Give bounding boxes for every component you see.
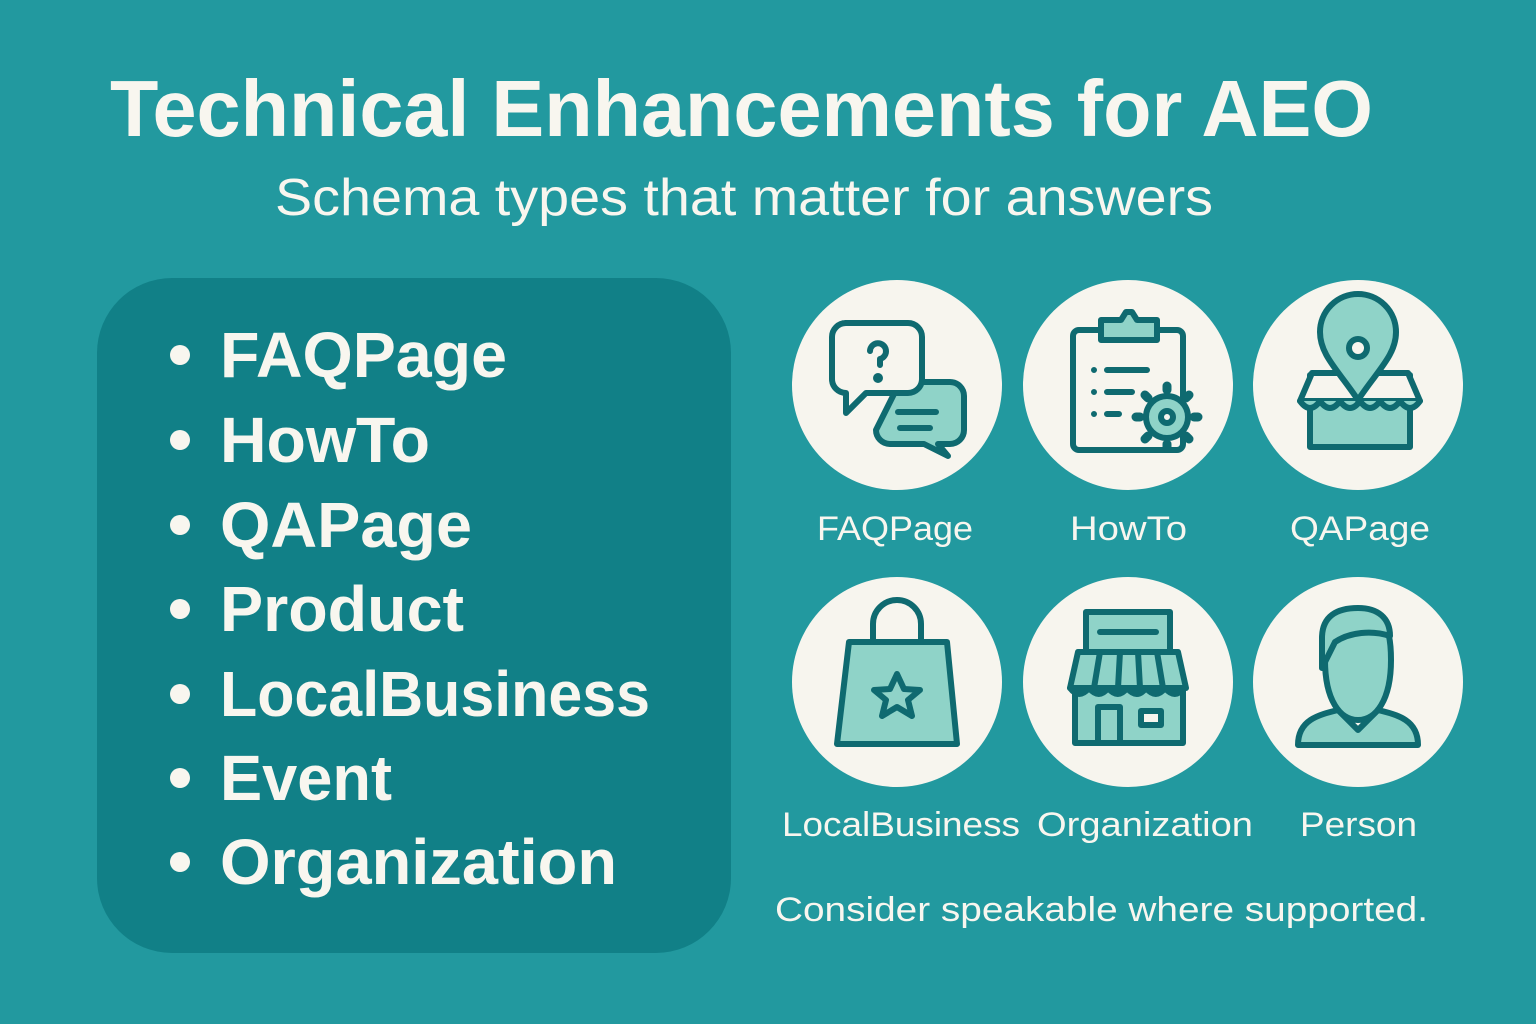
label: Organization: Organization: [1037, 806, 1253, 844]
title: Technical Enhancements for AEO: [110, 64, 1373, 153]
label: FAQPage: FAQPage: [817, 510, 973, 548]
label: QAPage: QAPage: [1290, 510, 1430, 548]
icon: Person: [1253, 577, 1463, 787]
icon: Organization: [1023, 577, 1233, 787]
list item: Event: Event: [220, 742, 392, 814]
label: LocalBusiness: LocalBusiness: [782, 806, 1020, 844]
list item: Organization: Organization: [220, 826, 617, 898]
label: Person: Person: [1300, 806, 1417, 844]
panel: schema list: [97, 278, 731, 953]
list item: Product: Product: [220, 573, 464, 645]
subtitle: Schema types that matter for answers: [275, 169, 1213, 227]
list item: HowTo: HowTo: [220, 404, 430, 476]
icon: FAQPage: [792, 280, 1002, 490]
label: HowTo: HowTo: [1070, 510, 1187, 548]
footnote: Consider speakable where supported.: [775, 891, 1428, 929]
list item: QAPage: QAPage: [220, 489, 472, 561]
icon: QAPage: [1253, 280, 1463, 490]
list item: FAQPage: FAQPage: [220, 319, 507, 391]
icon: LocalBusiness: [792, 577, 1002, 787]
icon: HowTo: [1023, 280, 1233, 490]
list item: LocalBusiness: LocalBusiness: [220, 658, 650, 730]
